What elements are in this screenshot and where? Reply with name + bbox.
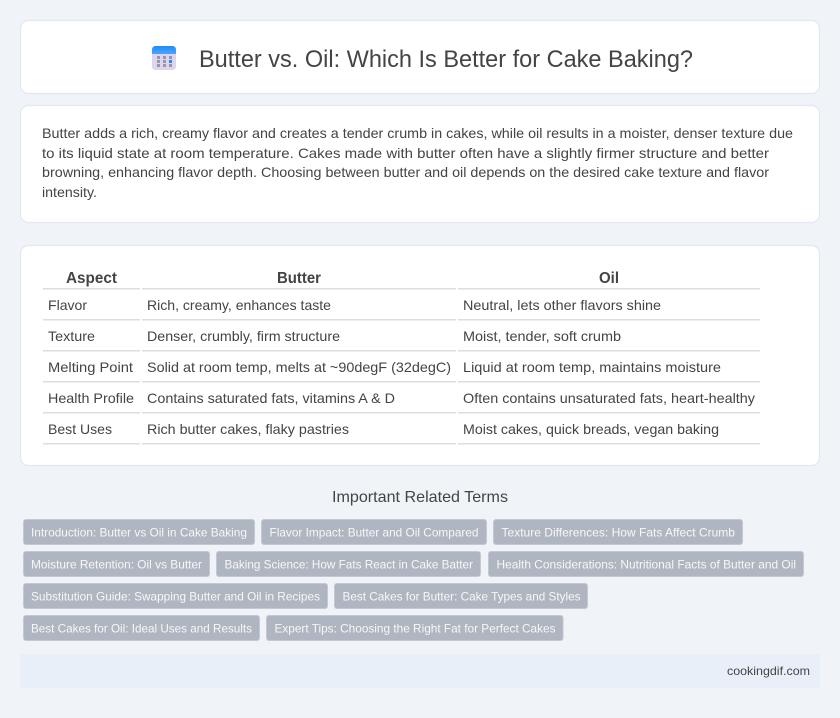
tag: best cakes for butter: Best Cakes for Butter: Cake Types and Styles bbox=[342, 590, 580, 604]
footer bar bbox=[20, 654, 820, 688]
row: texture: Moist, tender, soft crumb bbox=[463, 328, 621, 344]
tag: health considerations: Health Considerations: Nutritional Facts of Butter and Oil bbox=[496, 558, 796, 572]
tag: baking science bbox=[216, 552, 480, 576]
row: flavor: Rich, creamy, enhances taste bbox=[147, 297, 331, 313]
tag: health considerations bbox=[488, 552, 804, 576]
row: melting point: Liquid at room temp, maintains moisture bbox=[463, 359, 721, 375]
tag: best cakes for butter bbox=[334, 584, 588, 608]
tag: expert tips: Expert Tips: Choosing the Right Fat for Perfect Cakes bbox=[274, 622, 556, 636]
tag: best cakes for oil: Best Cakes for Oil: Ideal Uses and Results bbox=[31, 622, 252, 636]
row: melting point: Solid at room temp, melts at ~90degF (32degC) bbox=[147, 359, 451, 375]
row: best uses: Best Uses bbox=[48, 421, 112, 437]
table header row: Aspect bbox=[66, 270, 118, 287]
row: health profile: Health Profile bbox=[48, 390, 134, 406]
row: melting point: Melting Point bbox=[48, 359, 133, 375]
row: texture: Texture bbox=[48, 328, 95, 344]
tag: flavor impact bbox=[262, 520, 486, 544]
panel: header bbox=[20, 20, 820, 94]
tag: flavor impact: Flavor Impact: Butter and Oil Compared bbox=[270, 526, 478, 540]
panel: summary bbox=[20, 106, 820, 222]
row: best uses: Rich butter cakes, flaky pastries bbox=[147, 421, 349, 437]
table header row bbox=[66, 270, 619, 287]
tag: moisture retention: Moisture Retention: Oil vs Butter bbox=[31, 558, 202, 572]
summary paragraph bbox=[42, 125, 793, 200]
row: best uses: Moist cakes, quick breads, vegan baking bbox=[463, 421, 719, 437]
tag: baking science: Baking Science: How Fats React in Cake Batter bbox=[224, 558, 473, 572]
tag: substitution guide: Substitution Guide: Swapping Butter and Oil in Recipes bbox=[31, 590, 320, 604]
row: health profile bbox=[48, 390, 755, 406]
tag: expert tips bbox=[266, 616, 563, 640]
summary paragraph: to its liquid state at room temperature. Cakes made with butter often have a slightly firmer structure and better bbox=[42, 145, 769, 161]
row: texture bbox=[48, 328, 621, 344]
summary paragraph: browning, enhancing flavor depth. Choosing between butter and oil depends on the desired cake texture and flavor bbox=[42, 164, 769, 180]
tag: moisture retention bbox=[24, 552, 210, 576]
row: flavor: Flavor bbox=[48, 297, 87, 313]
tag: best cakes for oil bbox=[24, 616, 260, 640]
row: texture: Denser, crumbly, firm structure bbox=[147, 328, 340, 344]
row: melting point bbox=[48, 359, 721, 375]
table header row: Oil bbox=[599, 270, 619, 287]
row: best uses bbox=[48, 421, 719, 437]
row: health profile: Contains saturated fats, vitamins A & D bbox=[147, 390, 395, 406]
icon: calendar bbox=[152, 46, 176, 70]
panel: comparison table bbox=[20, 246, 820, 466]
summary paragraph: intensity. bbox=[42, 184, 97, 200]
tag list bbox=[24, 520, 804, 640]
tag: substitution guide bbox=[24, 584, 328, 608]
tag: introduction: Introduction: Butter vs Oil in Cake Baking bbox=[31, 526, 247, 540]
tag: texture differences: Texture Differences: How Fats Affect Crumb bbox=[502, 526, 735, 540]
summary paragraph: Butter adds a rich, creamy flavor and creates a tender crumb in cakes, while oil results in a moister, denser texture due bbox=[42, 125, 793, 141]
title: Butter vs. Oil: Which Is Better for Cake Baking? bbox=[199, 46, 693, 73]
tag: introduction bbox=[24, 520, 254, 544]
row: flavor bbox=[48, 297, 661, 313]
row: flavor: Neutral, lets other flavors shine bbox=[463, 297, 661, 313]
heading: related terms: Important Related Terms bbox=[332, 489, 508, 506]
footer credit: cookingdif.com bbox=[727, 664, 810, 678]
tag: texture differences bbox=[494, 520, 742, 544]
row: health profile: Often contains unsaturated fats, heart-healthy bbox=[463, 390, 755, 406]
table header row: Butter bbox=[277, 270, 321, 287]
